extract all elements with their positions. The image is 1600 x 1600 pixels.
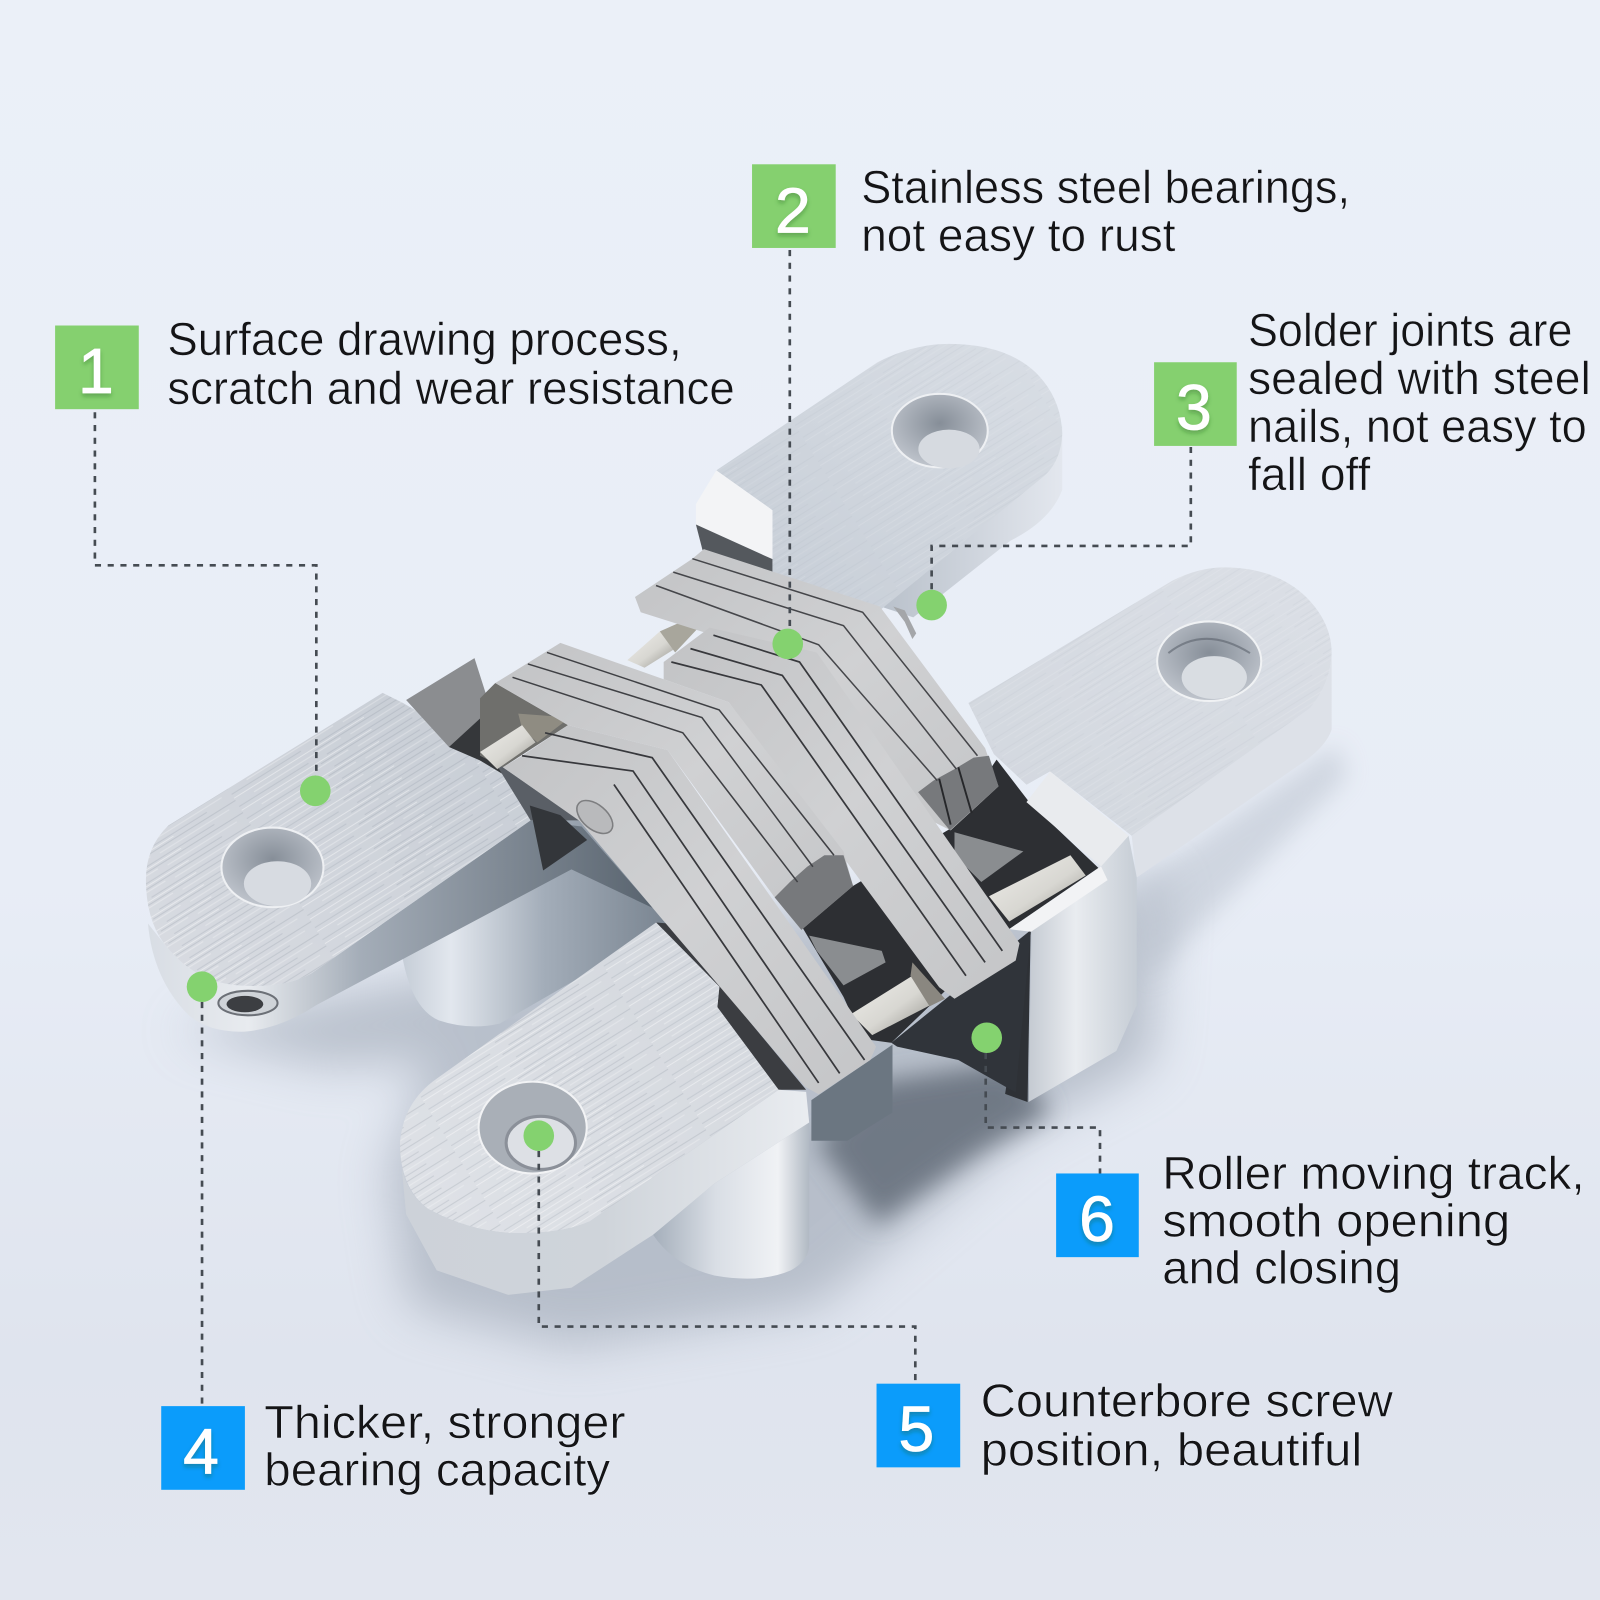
- leader line 5: [539, 1151, 915, 1384]
- left collar: [518, 714, 570, 742]
- number 2: 2: [775, 175, 811, 247]
- middle roller: [851, 976, 932, 1035]
- rear stack tips: [918, 756, 998, 830]
- number 1: 1: [78, 335, 114, 407]
- leader line 4: [201, 1002, 203, 1406]
- right support block: [1005, 836, 1137, 1102]
- front right link stack: [664, 628, 1020, 999]
- label 4: Thicker, stronger: [264, 1396, 626, 1448]
- number badge 4: [161, 1406, 245, 1490]
- left roller: [480, 725, 535, 769]
- callout 4: [161, 971, 626, 1496]
- target dot 4: [187, 971, 217, 1002]
- number badge 3: [1154, 362, 1237, 446]
- right plate: [968, 567, 1332, 878]
- number badge 5: [877, 1384, 960, 1467]
- leader line 3: [932, 447, 1191, 594]
- left cylinder: [398, 816, 673, 1026]
- right plate screw hole: [1157, 621, 1261, 701]
- left plate screw hole: [221, 828, 323, 907]
- label 5: Counterbore screw: [981, 1374, 1394, 1426]
- scissor link mechanism: [480, 549, 1129, 1141]
- callout 5: [523, 1120, 1394, 1475]
- front plate: [400, 922, 809, 1295]
- front cylinder: [653, 1122, 809, 1279]
- callout 6: [971, 1022, 1585, 1294]
- upper pin: [627, 616, 706, 668]
- label 6: and closing: [1162, 1242, 1401, 1294]
- upper left link stack: [495, 643, 853, 930]
- rear rivet end: [893, 607, 916, 639]
- target dot 3: [916, 590, 947, 620]
- inner gear block right: [954, 832, 1023, 882]
- label 3: nails, not easy to: [1248, 400, 1587, 452]
- rivet: [571, 794, 619, 840]
- lower grey block: [811, 1045, 892, 1141]
- shadow under lower left stack: [530, 806, 587, 871]
- side set-screw hole: [218, 991, 278, 1015]
- left plate: [146, 658, 653, 1032]
- label 1: Surface drawing process,: [167, 313, 682, 365]
- label 2: not easy to rust: [861, 209, 1176, 261]
- label 2: Stainless steel bearings,: [861, 161, 1350, 213]
- label 3: Solder joints are: [1248, 304, 1572, 356]
- number 3: 3: [1176, 372, 1212, 444]
- number 5: 5: [898, 1393, 934, 1465]
- callout 3: [916, 304, 1591, 620]
- back plate: [696, 344, 1062, 617]
- label 6: smooth opening: [1162, 1195, 1510, 1247]
- target dot 1: [300, 776, 331, 806]
- ground shadow: [173, 745, 1347, 1347]
- rear link stack: [635, 549, 998, 830]
- target dot 5: [523, 1120, 554, 1151]
- callout 2: [752, 161, 1350, 659]
- left gap: [480, 683, 568, 767]
- white edge of right plate: [1009, 866, 1108, 932]
- right roller: [989, 855, 1086, 921]
- leader line 2: [788, 250, 791, 633]
- right white chamfer: [1026, 771, 1129, 866]
- hinge illustration: [146, 344, 1332, 1295]
- dark interior: [782, 760, 1098, 1043]
- inner gear block middle: [809, 936, 886, 985]
- number badge 2: [752, 164, 836, 248]
- front plate screw hole: [479, 1082, 587, 1173]
- number badge 6: [1056, 1173, 1139, 1257]
- roller collar: [910, 962, 945, 1006]
- target dot 6: [971, 1022, 1002, 1053]
- target dot 2: [772, 629, 803, 659]
- upper left stack tips: [775, 855, 853, 930]
- left slot block: [406, 658, 580, 820]
- label 1: scratch and wear resistance: [167, 362, 735, 414]
- number 6: 6: [1079, 1183, 1115, 1255]
- label 3: fall off: [1248, 448, 1371, 500]
- callout 1: [55, 313, 735, 806]
- leader line 1: [95, 412, 316, 778]
- label 3: sealed with steel: [1248, 352, 1591, 404]
- number badge 1: [55, 326, 139, 409]
- leader line 6: [986, 1053, 1100, 1173]
- back plate screw hole: [892, 394, 988, 468]
- label 6: Roller moving track,: [1162, 1147, 1585, 1199]
- lower left link stack: [503, 725, 876, 1094]
- number 4: 4: [183, 1415, 219, 1487]
- dark cavity: [891, 930, 1031, 1092]
- label 4: bearing capacity: [264, 1444, 610, 1496]
- label 5: position, beautiful: [981, 1423, 1362, 1475]
